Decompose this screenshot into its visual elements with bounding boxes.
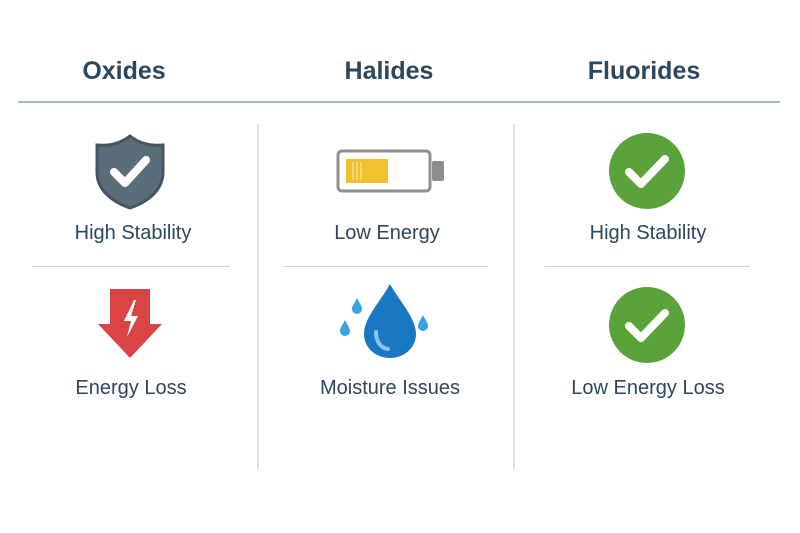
- heading: Halides: Halides: [345, 57, 433, 85]
- label: Energy Loss: Energy Loss: [75, 377, 187, 399]
- label: High Stability (Oxides): High Stability: [75, 222, 191, 244]
- label: High Stability (Fluorides): High Stability: [590, 222, 706, 244]
- icon: energy loss arrow: [98, 289, 162, 358]
- heading: Fluorides: Fluorides: [588, 57, 700, 85]
- label: Low Energy Loss: Low Energy Loss: [571, 377, 725, 399]
- heading: Oxides: Oxides: [82, 57, 166, 85]
- label: Low Energy: Low Energy: [334, 222, 440, 244]
- icon: water drop: [340, 284, 428, 358]
- icon: check circle 2: [609, 287, 685, 363]
- label: Moisture Issues: Moisture Issues: [320, 377, 460, 399]
- icon: battery: [336, 150, 444, 192]
- icon: shield: [96, 134, 164, 210]
- icon: check circle 1: [609, 133, 685, 209]
